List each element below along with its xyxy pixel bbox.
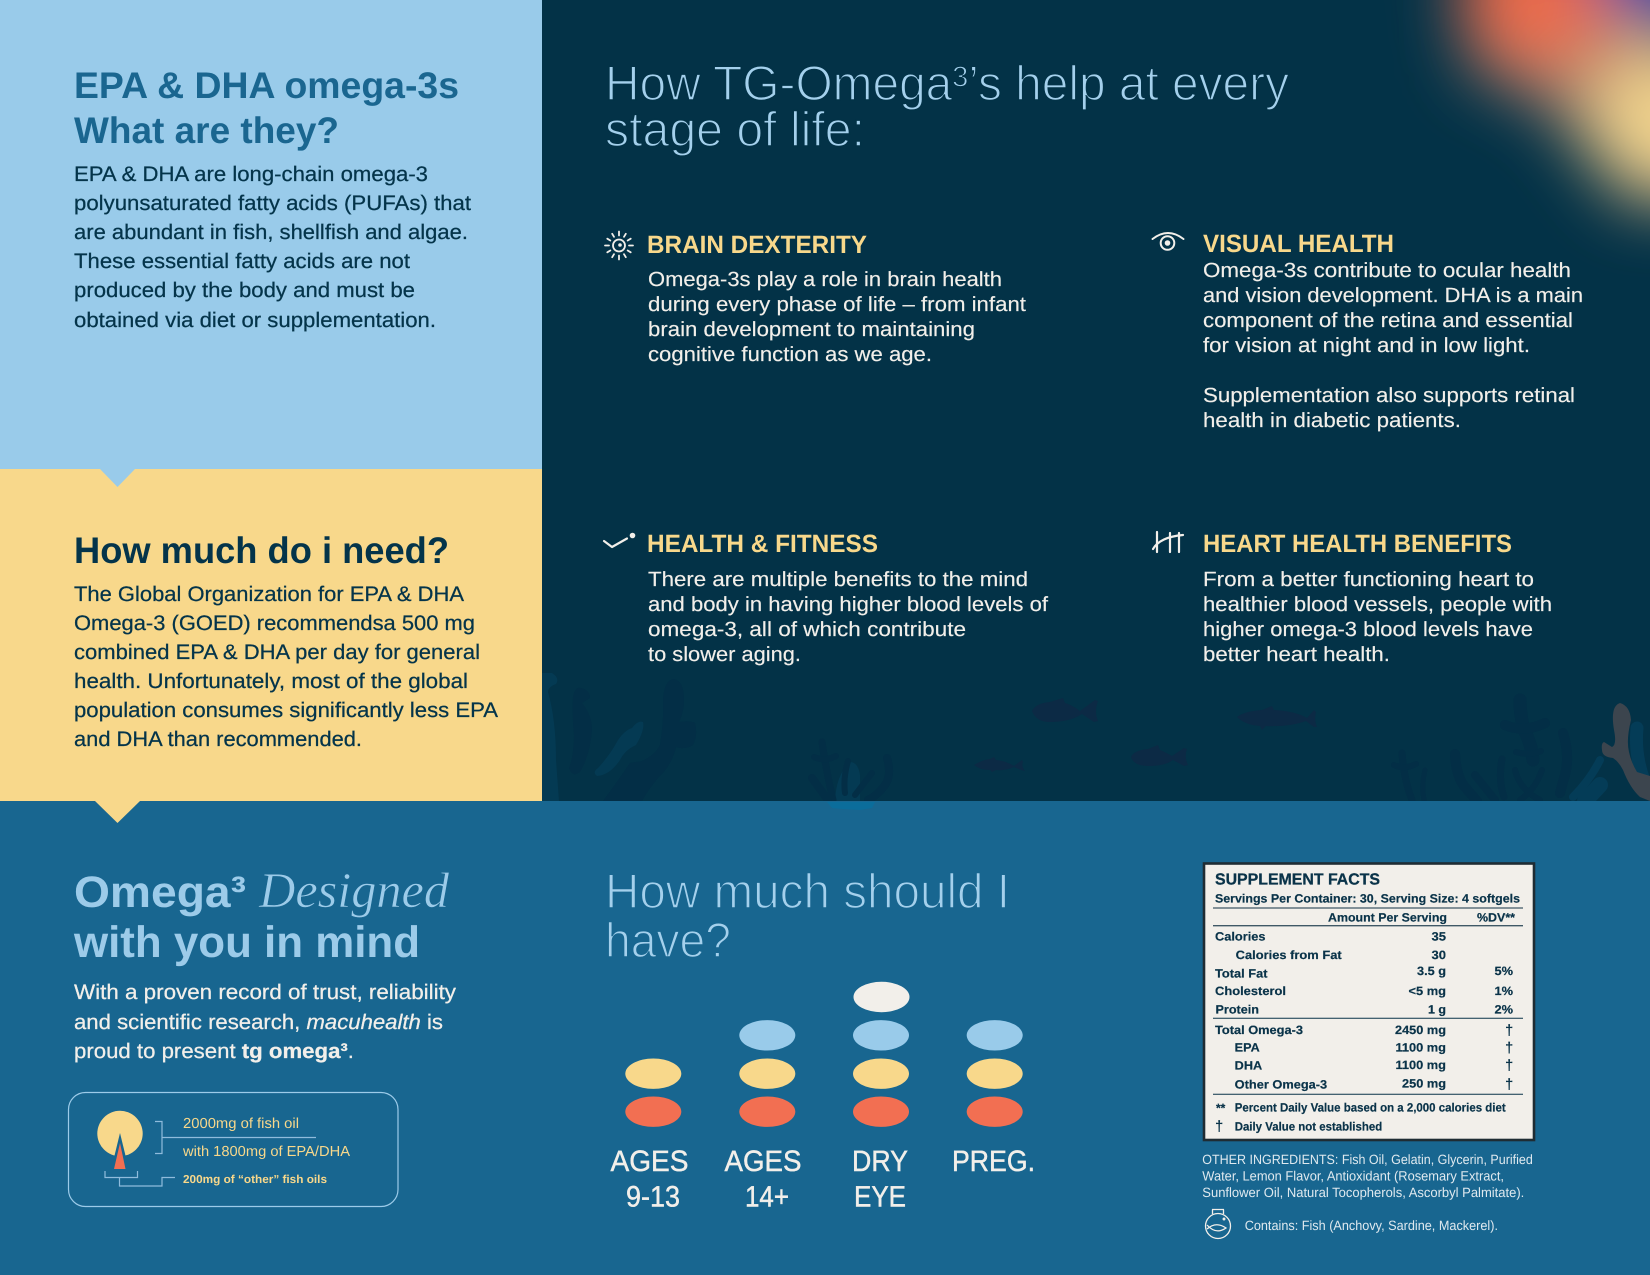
- text block: trust: proud to present tg omega³ .: [74, 1040, 354, 1063]
- seaweed base: [827, 802, 875, 810]
- section: designed with you in mind: [68, 862, 457, 1206]
- text block: visual health: [1203, 259, 1583, 432]
- composition labels: 200mg of “other” fish oils: [183, 1174, 327, 1186]
- icon: tick with dot: [604, 533, 635, 547]
- panel: dark background: [542, 0, 1650, 802]
- table: omega-3 rows: 1100 mg: [1396, 1040, 1446, 1054]
- servings line: Servings Per Container: 30, Serving Size: 4 softgels: [1215, 892, 1520, 906]
- text block: EPA and DHA description: produced by the body and must be: [74, 279, 415, 302]
- text block: GOED recommendation: The Global Organization for EPA & DHA: [74, 583, 464, 606]
- icon: brain sun: [605, 232, 633, 260]
- text block: EPA and DHA description: These essential fatty acids are not: [74, 250, 410, 273]
- table: omega-3 rows: †: [1505, 1057, 1513, 1074]
- text block: trust: and scientific research, macuhealth is: [74, 1011, 443, 1034]
- footnotes: †: [1215, 1118, 1223, 1135]
- composition labels: [182, 1116, 350, 1186]
- arrow: blue pointer: [100, 469, 135, 487]
- text block: other ingredients: [1202, 1152, 1533, 1200]
- text block: visual health: Omega-3s contribute to ocular health: [1203, 259, 1571, 282]
- composition labels: with 1800mg of EPA/DHA: [182, 1144, 350, 1160]
- table: nutrition rows: Cholesterol: [1215, 984, 1286, 998]
- callout: softgel composition: [68, 1092, 398, 1206]
- section: heart health: [1153, 530, 1552, 666]
- table: nutrition rows: 1 g: [1428, 1002, 1446, 1016]
- heading: health and fitness: HEALTH & FITNESS: [647, 530, 878, 558]
- text block: EPA and DHA description: EPA & DHA are long-chain omega-3: [74, 163, 428, 186]
- footnotes: [1215, 1101, 1506, 1135]
- text block: GOED recommendation: population consumes significantly less EPA: [74, 699, 498, 722]
- text block: brain dexterity: during every phase of life – from infant: [648, 293, 1026, 316]
- heading: how much should I have: How much should I: [605, 865, 1010, 919]
- section: brain dexterity: [605, 231, 1026, 366]
- column: ages 14+: [724, 1020, 802, 1214]
- table column headers: Amount Per Serving: [1328, 911, 1447, 925]
- footnotes: **: [1216, 1101, 1226, 1115]
- text block: health and fitness: [648, 568, 1048, 666]
- heading: EPA and DHA: [74, 65, 459, 151]
- table: omega-3 rows: †: [1505, 1076, 1513, 1093]
- composition labels: 2000mg of fish oil: [183, 1116, 299, 1132]
- heading: brain dexterity: BRAIN DEXTERITY: [647, 231, 867, 259]
- heading: how TG-Omega helps: stage of life:: [605, 103, 865, 157]
- table: nutrition rows: Total Fat: [1215, 966, 1268, 980]
- table: omega-3 rows: 250 mg: [1402, 1076, 1446, 1090]
- table: nutrition rows: Calories from Fat: [1236, 948, 1342, 962]
- text block: health and fitness: and body in having higher blood levels of: [648, 593, 1048, 616]
- table: nutrition rows: [1215, 930, 1513, 1016]
- text block: heart health: healthier blood vessels, people with: [1203, 593, 1552, 616]
- icon: softgel pie: [97, 1111, 143, 1170]
- heading: how TG-Omega helps: [605, 57, 1289, 157]
- heading: supplement facts: SUPPLEMENT FACTS: [1215, 872, 1380, 888]
- text block: heart health: [1203, 568, 1552, 666]
- footnotes: Daily Value not established: [1235, 1120, 1382, 1134]
- table column headers: %DV**: [1477, 911, 1515, 925]
- table: nutrition rows: 30: [1432, 948, 1446, 962]
- heading: how TG-Omega helps: How TG-Omega³’s help at every: [605, 57, 1289, 111]
- text block: EPA and DHA description: [74, 163, 471, 332]
- heading: visual health: VISUAL HEALTH: [1203, 230, 1394, 258]
- column: pregnancy: PREG.: [952, 1145, 1035, 1178]
- column: dry eye: EYE: [854, 1180, 906, 1214]
- icon: heart vessels: [1153, 532, 1183, 552]
- heading: heart health benefits: HEART HEALTH BENEFITS: [1203, 530, 1512, 558]
- text block: other ingredients: Sunflower Oil, Natural Tocopherols, Ascorbyl Palmitate).: [1202, 1185, 1524, 1200]
- icon: eye: [1152, 233, 1184, 250]
- text block: EPA and DHA description: polyunsaturated fatty acids (PUFAs) that: [74, 192, 471, 215]
- panel: bottom band: [0, 801, 1650, 1275]
- brackets: [105, 1122, 316, 1186]
- text block: brain dexterity: [648, 268, 1026, 366]
- table: omega-3 rows: 2450 mg: [1395, 1023, 1446, 1037]
- column: ages 9-13: 9-13: [626, 1180, 680, 1214]
- column: ages 14+: 14+: [745, 1180, 789, 1214]
- text block: visual health: for vision at night and in low light.: [1203, 334, 1530, 357]
- table: nutrition rows: 1%: [1494, 984, 1513, 998]
- table: omega-3 rows: †: [1505, 1022, 1513, 1039]
- section: health and fitness: [604, 530, 1048, 666]
- column: dry eye: DRY: [852, 1145, 908, 1178]
- text block: other ingredients: Water, Lemon Flavor, Antioxidant (Rosemary Extract,: [1202, 1169, 1504, 1184]
- heading: omega designed: [73, 862, 450, 967]
- table: omega-3 rows: [1215, 1022, 1513, 1093]
- text block: visual health: Supplementation also supports retinal: [1203, 384, 1575, 407]
- heading: omega designed: Omega³: [74, 868, 246, 917]
- table: omega-3 rows: EPA: [1235, 1040, 1260, 1054]
- table: omega-3 rows: 1100 mg: [1396, 1058, 1446, 1072]
- table: omega-3 rows: †: [1505, 1040, 1513, 1056]
- text block: health and fitness: to slower aging.: [648, 643, 801, 666]
- text block: trust: [74, 981, 457, 1063]
- colour glow top right: [1459, 0, 1650, 205]
- column: ages 14+: AGES: [724, 1145, 802, 1178]
- table: nutrition rows: 35: [1432, 930, 1446, 944]
- panel: supplement facts: [1204, 864, 1534, 1140]
- table rules: [1213, 908, 1523, 926]
- footnotes: Percent Daily Value based on a 2,000 calories diet: [1235, 1101, 1506, 1115]
- heading: omega designed: with you in mind: [73, 918, 420, 967]
- arrow: yellow pointer: [95, 801, 140, 823]
- heading: EPA and DHA: EPA & DHA omega-3s: [74, 65, 459, 106]
- table: nutrition rows: 3.5 g: [1417, 964, 1446, 978]
- text block: GOED recommendation: Omega-3 (GOED) recommendsa 500 mg: [74, 612, 475, 635]
- text block: GOED recommendation: and DHA than recommended.: [74, 728, 362, 751]
- heading: omega designed: Designed: [258, 862, 450, 918]
- heading: how much do i need: How much do i need?: [74, 530, 449, 571]
- column: ages 9-13: AGES: [610, 1145, 688, 1178]
- column: pregnancy: [952, 1020, 1035, 1178]
- section: visual health: [1152, 230, 1583, 432]
- text block: GOED recommendation: combined EPA & DHA per day for general: [74, 641, 480, 664]
- rule: [1213, 1018, 1523, 1094]
- table: nutrition rows: 2%: [1494, 1002, 1513, 1016]
- table: omega-3 rows: Other Omega-3: [1235, 1078, 1328, 1092]
- heading: EPA and DHA: What are they?: [74, 110, 339, 151]
- chart: softgel dosage: [610, 982, 1035, 1214]
- text block: heart health: better heart health.: [1203, 643, 1390, 666]
- column: ages 9-13: [610, 1058, 688, 1214]
- heading: how much should I have: have?: [605, 914, 731, 968]
- text block: heart health: higher omega-3 blood levels have: [1203, 618, 1533, 641]
- text block: brain dexterity: Omega-3s play a role in brain health: [648, 268, 1002, 291]
- text block: heart health: From a better functioning heart to: [1203, 568, 1534, 591]
- table: nutrition rows: <5 mg: [1408, 984, 1446, 998]
- text block: EPA and DHA description: are abundant in fish, shellfish and algae.: [74, 221, 468, 244]
- column: dry eye: [852, 982, 910, 1214]
- heading: how much should I have: [605, 865, 1010, 968]
- text block: GOED recommendation: [74, 583, 498, 751]
- text block: GOED recommendation: health. Unfortunately, most of the global: [74, 670, 468, 693]
- text block: other ingredients: OTHER INGREDIENTS: Fish Oil, Gelatin, Glycerin, Purified: [1202, 1152, 1533, 1167]
- table column headers: [1328, 911, 1515, 925]
- seaweed and fish silhouettes: [542, 673, 1650, 801]
- allergen note: Contains: Fish (Anchovy, Sardine, Mackerel).: [1245, 1218, 1498, 1233]
- text block: trust: With a proven record of trust, reliability: [74, 981, 457, 1004]
- table: nutrition rows: 5%: [1494, 964, 1513, 978]
- text block: brain dexterity: brain development to maintaining: [648, 318, 975, 341]
- text block: health and fitness: There are multiple benefits to the mind: [648, 568, 1028, 591]
- text block: brain dexterity: cognitive function as we age.: [648, 343, 932, 366]
- text block: health and fitness: omega-3, all of which contribute: [648, 618, 966, 641]
- text block: visual health: health in diabetic patients.: [1203, 409, 1461, 432]
- table: omega-3 rows: DHA: [1235, 1058, 1263, 1072]
- table: omega-3 rows: Total Omega-3: [1215, 1023, 1303, 1037]
- icon: fish jar: [1206, 1210, 1230, 1238]
- table: nutrition rows: Calories: [1215, 930, 1266, 944]
- table: nutrition rows: Protein: [1216, 1002, 1259, 1016]
- text block: EPA and DHA description: obtained via diet or supplementation.: [74, 309, 436, 332]
- panel: how much do i need: [0, 469, 542, 801]
- panel: EPA and DHA: [0, 0, 542, 469]
- text block: visual health: component of the retina and essential: [1203, 309, 1573, 332]
- text block: visual health: and vision development. DHA is a main: [1203, 284, 1583, 307]
